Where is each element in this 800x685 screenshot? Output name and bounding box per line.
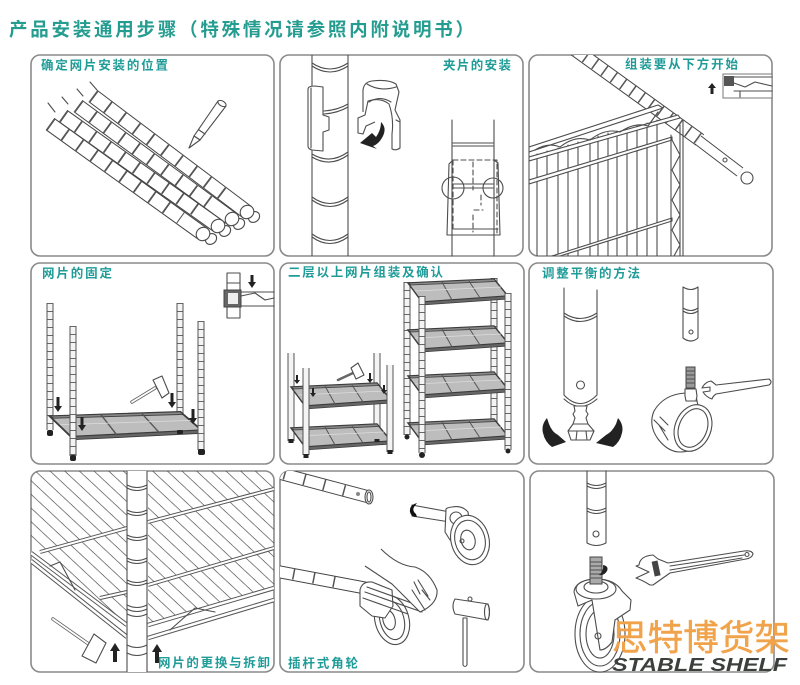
label: fixing: 网片的固定: [42, 266, 112, 280]
icon: arrows down small: [294, 373, 387, 397]
icon: shelf corner close-up: [31, 471, 274, 672]
icon: caster with stem: [410, 503, 495, 569]
icon: clip schematic: [442, 120, 503, 256]
icon: four poles: [48, 82, 262, 247]
label: upper layers: 二层以上网片组装及确认: [288, 264, 443, 280]
label: position: 确定网片安装的位置: [41, 58, 168, 72]
icon: mallet: [453, 597, 490, 666]
panel: caster adjustment: [530, 471, 774, 672]
panel: assemble from bottom: [529, 46, 772, 256]
title: 产品安装通用步骤（特殊情况请参照内附说明书）: [9, 19, 474, 40]
icon: four-tier rack: [404, 278, 510, 458]
icon: pole with clip: [308, 55, 348, 256]
icon: pole end: [587, 471, 606, 546]
icon: mallet: [132, 376, 169, 402]
icon: mallet small: [338, 363, 364, 380]
icon: mallet: [53, 619, 106, 663]
icon: shelf on four poles: [47, 303, 205, 461]
icon: caster and spanner: [652, 367, 771, 457]
panel: mesh installation position: [31, 55, 274, 256]
icon: hand inserting caster: [360, 549, 437, 649]
icon: arrows down: [54, 275, 256, 431]
icon: swivel caster: [574, 557, 631, 672]
icon: marker pen: [189, 99, 227, 148]
panel: stem casters: [275, 471, 524, 672]
label: levelling: 调整平衡的方法: [542, 266, 640, 280]
icon: tube end: [683, 287, 698, 341]
label: clip: 夹片的安装: [443, 58, 511, 72]
icon: adjustable wrench: [636, 551, 753, 585]
panel: mesh replacement: [31, 471, 274, 672]
panel: clip installation: [280, 55, 523, 256]
icon: upper pole: [275, 472, 373, 588]
icon: pole with adjustable foot: [564, 288, 597, 440]
icon: rotate arrows: [542, 418, 622, 447]
icon: mesh corner with pole: [529, 46, 753, 256]
icon: rotate arrow: [360, 122, 385, 149]
label: casters: 插杆式角轮: [288, 656, 358, 670]
icon: open clip: [358, 80, 400, 150]
icon: clip detail inset: [224, 273, 274, 318]
icon: two-tier rack: [288, 353, 392, 458]
icon: detail inset: [723, 74, 772, 98]
watermark: brand latin: STABLE SHELF: [612, 655, 788, 675]
panel: two or more layers: [280, 263, 524, 464]
label: replacement: 网片的更换与拆卸: [158, 655, 270, 670]
icon: arrows up: [110, 643, 162, 663]
label: start from bottom: 组装要从下方开始: [625, 56, 738, 72]
panel: levelling method: [529, 263, 773, 464]
panel: mesh fixing: [31, 263, 274, 464]
icon: up arrow: [708, 83, 716, 94]
watermark: brand name: 思特博货架: [612, 618, 790, 658]
